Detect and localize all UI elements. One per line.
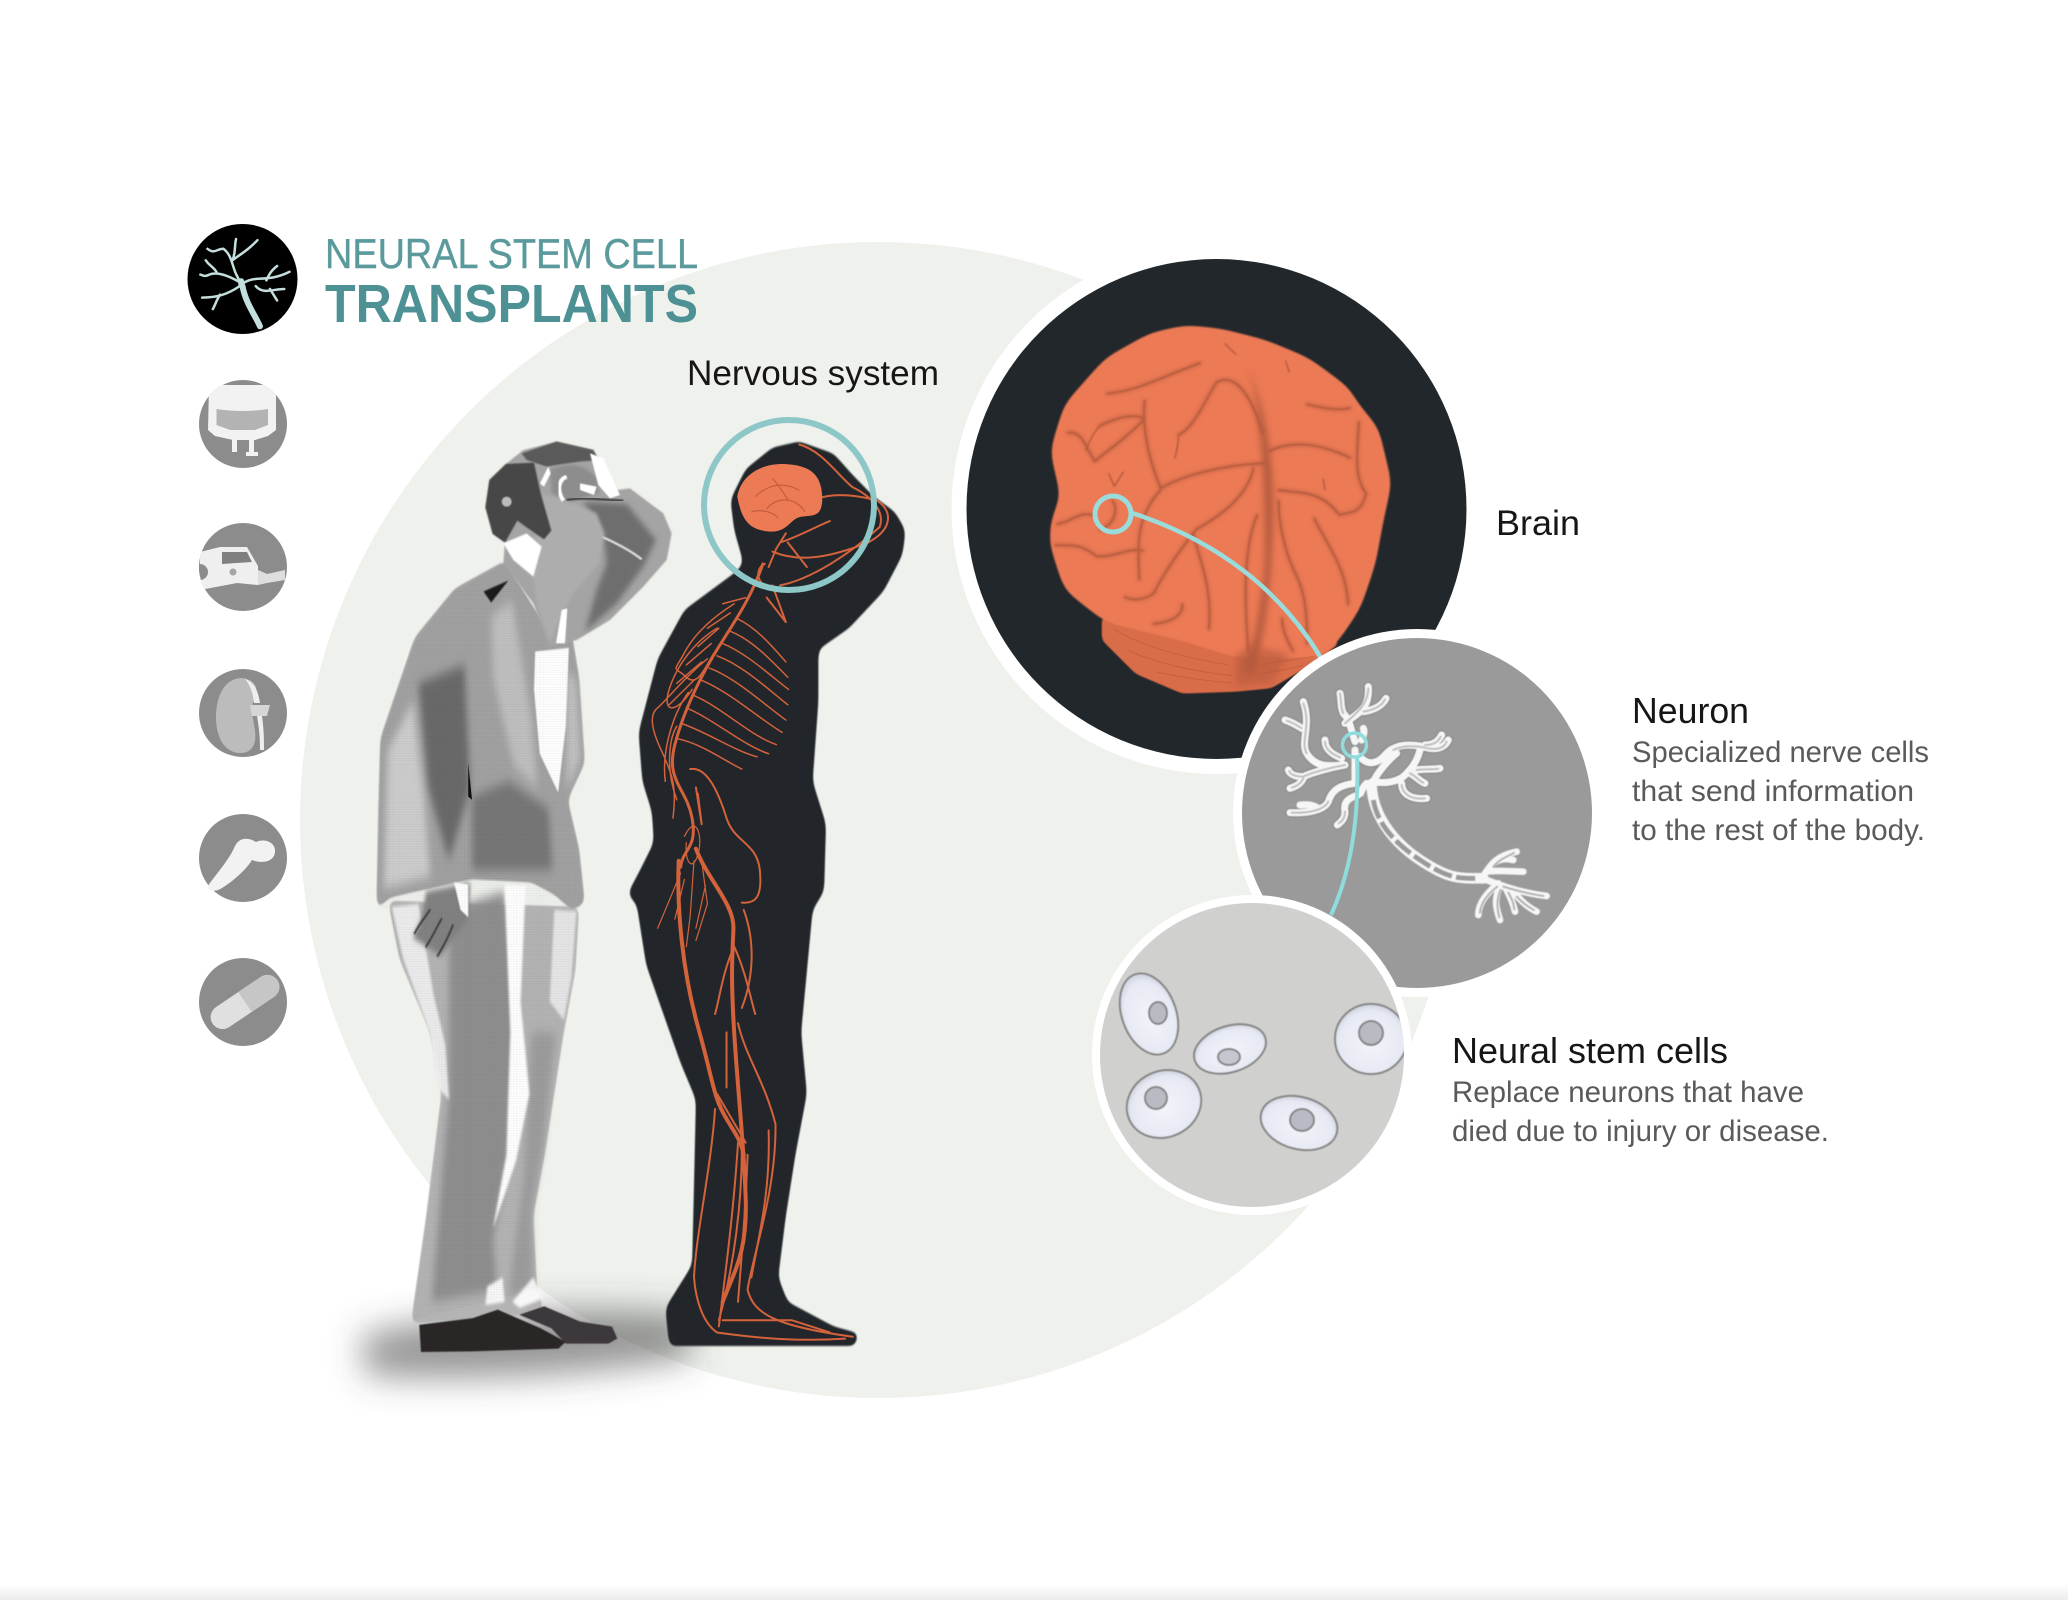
dendrite inner shading — [1287, 688, 1447, 823]
trousers — [376, 561, 585, 1323]
neuron description: Specialized nerve cells — [1632, 736, 1929, 769]
white ring — [952, 244, 1482, 774]
cerebrum — [1049, 325, 1392, 658]
stem cells description: died due to injury or disease. — [1452, 1115, 1829, 1148]
dark disc — [966, 259, 1466, 759]
light disc — [1100, 903, 1404, 1207]
ground shadow — [362, 1310, 690, 1378]
neuron illustration — [1285, 687, 1547, 920]
icon: capsule pill — [199, 958, 287, 1046]
label: nervous system: Nervous system — [687, 354, 939, 393]
neuron description: that send information — [1632, 775, 1914, 808]
silhouette — [627, 441, 906, 1346]
icon: femur bone — [199, 814, 287, 902]
hand on thigh — [413, 882, 470, 956]
spine — [672, 564, 763, 867]
connector to stem cells — [1331, 757, 1357, 915]
sulci soft shadow — [1055, 363, 1366, 651]
halftone overlay — [378, 564, 583, 1320]
cerebellum folds — [1114, 629, 1314, 683]
neuron zoom ring — [1342, 733, 1366, 757]
fissure shadow — [1241, 365, 1273, 674]
black disc — [188, 224, 298, 334]
nervous system highlight ring — [704, 420, 874, 590]
cell 4 — [1259, 1094, 1339, 1152]
sulci lines — [1055, 344, 1366, 651]
title — [325, 230, 698, 334]
neuron description: to the rest of the body. — [1632, 814, 1925, 847]
pelvic loop — [690, 769, 760, 903]
nerves — [652, 444, 888, 1340]
dendrites halo — [1285, 687, 1448, 825]
label: neural stem cells — [1452, 1030, 1829, 1148]
panel: neuron — [1233, 629, 1601, 997]
cerebellum — [1102, 605, 1339, 694]
stem cells description: Replace neurons that have — [1452, 1076, 1804, 1109]
neuron heading: Neuron — [1632, 690, 1749, 731]
axon — [1372, 787, 1483, 878]
bottom edge fade — [0, 1584, 2068, 1600]
cell 3 — [1125, 1068, 1203, 1140]
stem cells heading: Neural stem cells — [1452, 1030, 1728, 1071]
figure: man in suit — [376, 442, 672, 1352]
cells — [1118, 972, 1404, 1152]
label: brain: Brain — [1496, 504, 1580, 543]
head and arm nerves — [758, 444, 888, 622]
icon: culture dish — [199, 380, 287, 468]
label: neuron — [1632, 690, 1929, 847]
grey disc — [1242, 638, 1592, 988]
icon: medical device — [192, 523, 287, 611]
shirt — [534, 648, 569, 792]
brain zoom ring — [1095, 496, 1131, 532]
cell 1 — [1118, 972, 1180, 1056]
cell 2 — [1192, 1022, 1268, 1076]
brain illustration — [1049, 325, 1392, 694]
connector to neuron — [1132, 513, 1325, 665]
head, hand and raised arm — [485, 442, 672, 647]
pelvic plexus — [658, 826, 707, 947]
title line 2: TRANSPLANTS — [325, 274, 698, 334]
axon terminal — [1478, 852, 1547, 920]
small brain — [737, 464, 822, 532]
logo: neuron in black circle — [188, 224, 298, 334]
title line 1: NEURAL STEM CELL — [325, 230, 698, 277]
panel: neural stem cells — [1092, 895, 1412, 1215]
dendrites — [1285, 687, 1448, 825]
white ring — [1092, 895, 1412, 1215]
main thigh nerves — [678, 861, 744, 1155]
white ring — [1233, 629, 1601, 997]
background pale circle — [300, 242, 1456, 1398]
logo neuron — [200, 239, 290, 326]
shoes — [419, 1306, 617, 1352]
jacket — [376, 561, 585, 910]
branching leg nerves — [715, 910, 853, 1337]
lower shading — [1236, 648, 1289, 686]
rib nerves — [677, 619, 789, 769]
figure: black silhouette with nervous system — [627, 441, 906, 1346]
panel: brain — [952, 244, 1482, 774]
icon: kidney — [199, 669, 287, 757]
cell 5 — [1335, 1004, 1407, 1074]
neuron description — [1632, 736, 1929, 847]
stem cells description — [1452, 1076, 1829, 1148]
